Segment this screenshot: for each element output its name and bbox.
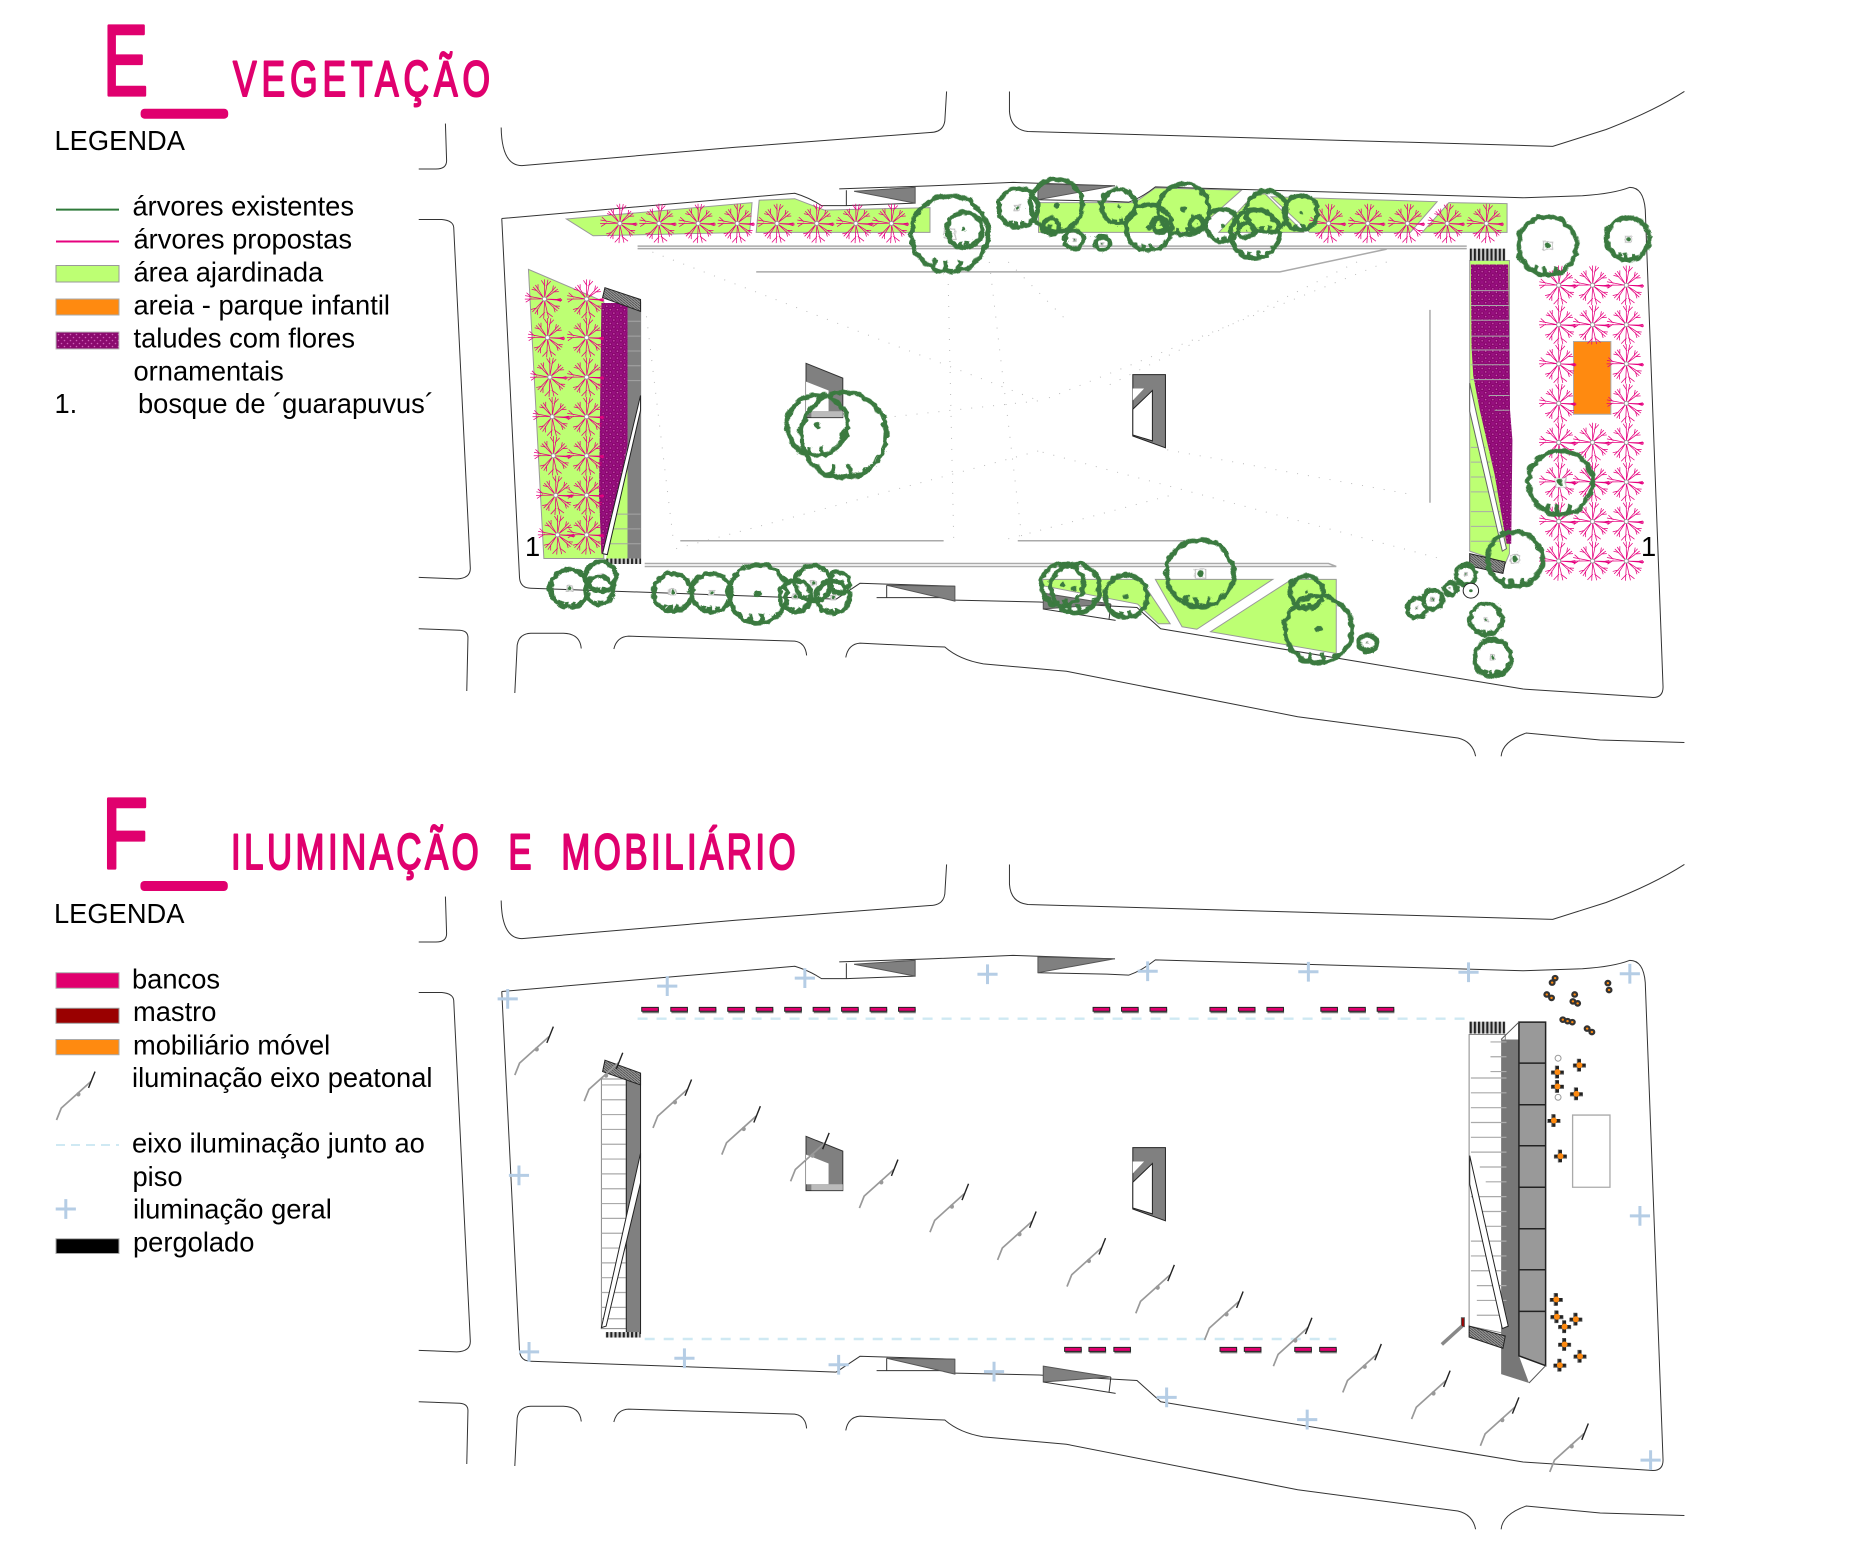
small black-ringed tree	[1463, 583, 1479, 598]
label 1 right: 1	[1641, 531, 1656, 562]
section E: vegetação	[54, 5, 1684, 756]
icon: general light cross	[56, 1199, 76, 1219]
right structure	[1469, 1022, 1610, 1383]
pedestrian axis lamps	[515, 1027, 1588, 1472]
title letter F: F	[102, 778, 148, 890]
title: iluminação e mobiliário: ILUMINAÇÃO E MOBILIÁRIO	[231, 824, 799, 880]
swatch: mobiliário móvel	[56, 1040, 119, 1055]
legend E	[54, 190, 434, 419]
proposed trees	[525, 204, 1644, 581]
site plan F equipment	[498, 961, 1661, 1472]
label: bancos: bancos	[132, 964, 220, 994]
label: bosque: bosque de ´guarapuvus´	[138, 388, 434, 419]
label: pergolado: pergolado	[133, 1226, 254, 1258]
left structure	[601, 1060, 641, 1338]
site plan F outlines	[419, 864, 1684, 1529]
icon: lamp	[56, 1072, 95, 1120]
legend heading F: LEGENDA	[54, 898, 185, 929]
floor light axes	[638, 1019, 1467, 1339]
label: eixo iluminação: eixo iluminação junto ao	[132, 1128, 425, 1159]
title underscore E	[141, 109, 228, 119]
label: ornamentais: ornamentais	[134, 356, 284, 387]
title underscore F	[140, 881, 228, 891]
plaza edge lines	[638, 246, 1467, 566]
swatch: área ajardinada	[56, 266, 119, 282]
swatch: bancos	[56, 973, 119, 988]
gardens	[528, 188, 1611, 653]
label: areia: areia - parque infantil	[134, 289, 390, 320]
mast	[1442, 1318, 1464, 1344]
title letter E: E	[103, 5, 148, 117]
base plan outlines	[419, 91, 1684, 756]
label: number 1: 1.	[54, 388, 77, 419]
site plan E	[419, 91, 1684, 756]
label 1 left: 1	[525, 531, 540, 562]
label: piso: piso	[132, 1161, 183, 1192]
swatch: árvores propostas	[56, 240, 119, 242]
label: taludes: taludes com flores	[134, 322, 355, 354]
existing trees	[549, 167, 1648, 675]
label: árvores propostas: árvores propostas	[134, 224, 352, 255]
label: área ajardinada: área ajardinada	[134, 257, 324, 288]
swatch: árvores existentes	[56, 209, 119, 211]
swatch: taludes	[56, 332, 119, 349]
benches	[642, 1007, 1394, 1353]
legend heading E: LEGENDA	[54, 125, 186, 156]
general light crosses	[498, 961, 1661, 1470]
movable furniture	[1544, 976, 1611, 1372]
section F: iluminação e mobiliário	[54, 778, 1684, 1529]
label: mastro: mastro	[133, 996, 216, 1027]
left slope structure	[599, 288, 641, 564]
swatch: areia	[56, 299, 119, 315]
swatch: floor light axis	[56, 1144, 119, 1146]
right slope structure	[1470, 249, 1512, 573]
label: mobiliário móvel: mobiliário móvel	[133, 1029, 330, 1060]
label: iluminação geral: iluminação geral	[133, 1193, 332, 1224]
label: árvores existentes: árvores existentes	[132, 190, 354, 222]
title: vegetação: VEGETAÇÃO	[233, 51, 495, 107]
swatch: pergolado	[56, 1239, 119, 1254]
swatch: mastro	[56, 1008, 119, 1023]
plaza dotted axes	[646, 252, 1440, 559]
label: iluminação eixo peatonal: iluminação eixo peatonal	[132, 1062, 432, 1093]
legend F	[56, 964, 432, 1258]
